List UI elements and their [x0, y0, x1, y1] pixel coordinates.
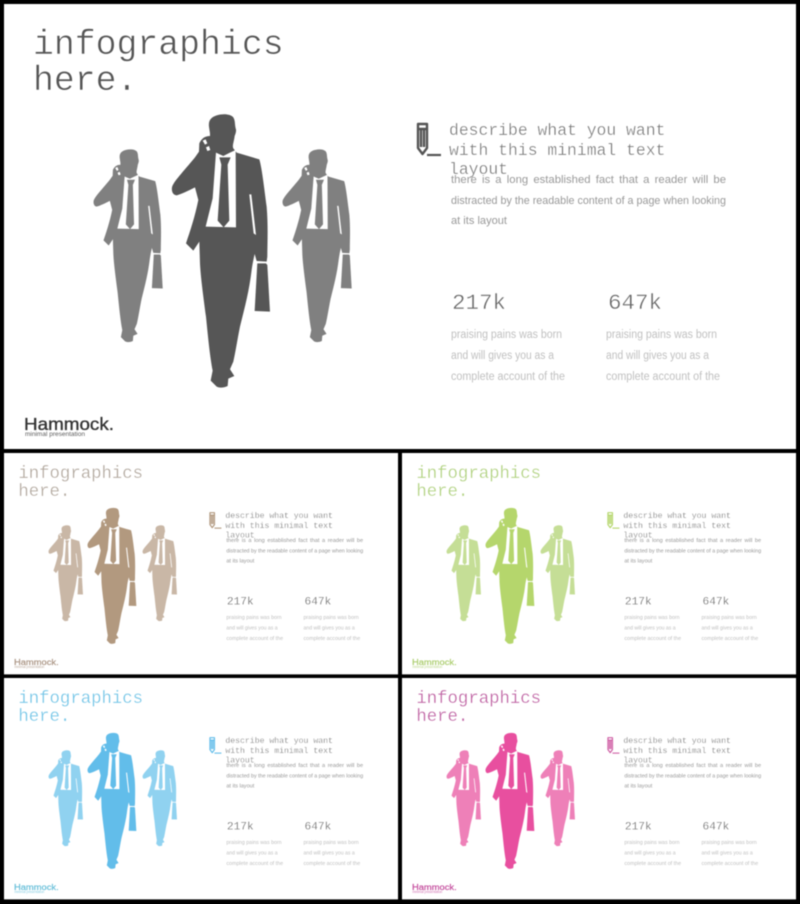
- title: infographics: [416, 690, 541, 709]
- stat caption left: and will gives you as a: [226, 626, 278, 632]
- title: infographics: [18, 465, 143, 484]
- stat caption left: praising pains was born: [624, 615, 680, 621]
- heading: layout: [225, 531, 255, 541]
- stat caption right: praising pains was born: [303, 840, 359, 846]
- logo: Hammock.: [412, 657, 457, 667]
- heading: describe what you want: [225, 511, 333, 521]
- body text: at its layout: [226, 783, 255, 789]
- stat caption right: complete account of the: [303, 861, 360, 867]
- heading: with this minimal text: [225, 746, 333, 756]
- body text: there is a long established fact that a reader will be: [226, 763, 363, 769]
- stat caption left: praising pains was born: [451, 329, 562, 341]
- stat caption right: complete account of the: [606, 371, 720, 383]
- logo: Hammock.: [14, 882, 59, 892]
- body text: at its layout: [451, 215, 507, 227]
- figures: three businessmen: [447, 733, 575, 869]
- stat caption left: complete account of the: [226, 861, 283, 867]
- stat caption left: and will gives you as a: [226, 851, 278, 857]
- icon: pencil: [608, 738, 619, 753]
- heading: describe what you want: [449, 121, 665, 140]
- body text: at its layout: [624, 558, 653, 564]
- title: here.: [18, 483, 70, 502]
- stat caption left: and will gives you as a: [451, 350, 555, 362]
- stat caption left: complete account of the: [451, 371, 565, 383]
- icon: pencil: [608, 513, 619, 528]
- heading: describe what you want: [623, 511, 731, 521]
- icon: pencil: [418, 124, 441, 155]
- stat: 647k: 647k: [304, 822, 332, 834]
- body text: there is a long established fact that a reader will be: [226, 538, 363, 544]
- panel: main grey slide: [4, 4, 796, 449]
- panel: green slide: [402, 453, 796, 674]
- title: infographics: [33, 26, 284, 65]
- stat caption left: praising pains was born: [226, 840, 282, 846]
- stat: 217k: 217k: [452, 290, 506, 316]
- figures: three businessmen: [94, 114, 352, 388]
- heading: with this minimal text: [449, 141, 665, 160]
- figures: three businessmen: [49, 508, 177, 644]
- stat: 647k: 647k: [304, 597, 332, 609]
- stat caption left: complete account of the: [226, 636, 283, 642]
- figures: three businessmen: [447, 508, 575, 644]
- body text: distracted by the readable content of a page when looking: [624, 549, 761, 555]
- stat caption left: praising pains was born: [624, 840, 680, 846]
- heading: with this minimal text: [623, 746, 731, 756]
- stat caption right: praising pains was born: [303, 615, 359, 621]
- panel: brown slide: [4, 453, 398, 674]
- panel: blue slide: [4, 678, 398, 899]
- title: here.: [33, 62, 137, 101]
- stat caption right: complete account of the: [701, 861, 758, 867]
- icon: pencil: [210, 513, 221, 528]
- stat caption left: complete account of the: [624, 861, 681, 867]
- stat: 217k: 217k: [625, 822, 652, 834]
- stat caption left: and will gives you as a: [624, 851, 676, 857]
- icon: pencil: [210, 738, 221, 753]
- stat caption right: complete account of the: [701, 636, 758, 642]
- body text: at its layout: [624, 783, 653, 789]
- body text: at its layout: [226, 558, 255, 564]
- stat caption right: complete account of the: [303, 636, 360, 642]
- body text: distracted by the readable content of a page when looking: [624, 774, 761, 780]
- logo: minimal presentation: [412, 665, 443, 669]
- heading: with this minimal text: [225, 521, 333, 531]
- logo: minimal presentation: [412, 890, 443, 894]
- stat: 217k: 217k: [625, 597, 652, 609]
- stat: 647k: 647k: [702, 822, 730, 834]
- body text: there is a long established fact that a reader will be: [624, 538, 761, 544]
- stat caption right: and will gives you as a: [303, 626, 355, 632]
- heading: describe what you want: [225, 736, 333, 746]
- stat caption right: and will gives you as a: [701, 626, 753, 632]
- body text: distracted by the readable content of a page when looking: [226, 549, 363, 555]
- stat: 217k: 217k: [227, 597, 254, 609]
- logo: minimal presentation: [14, 665, 45, 669]
- stat caption right: praising pains was born: [701, 840, 757, 846]
- logo: Hammock.: [14, 657, 59, 667]
- logo: Hammock.: [412, 882, 457, 892]
- title: infographics: [18, 690, 143, 709]
- panel: pink slide: [402, 678, 796, 899]
- stat caption right: and will gives you as a: [606, 350, 710, 362]
- stat: 647k: 647k: [702, 597, 730, 609]
- heading: layout: [623, 531, 653, 541]
- logo: minimal presentation: [14, 890, 45, 894]
- stat caption right: and will gives you as a: [303, 851, 355, 857]
- stat caption right: praising pains was born: [606, 329, 717, 341]
- stat caption left: praising pains was born: [226, 615, 282, 621]
- stat caption left: complete account of the: [624, 636, 681, 642]
- title: here.: [18, 708, 70, 727]
- heading: layout: [449, 160, 508, 179]
- heading: layout: [623, 756, 653, 766]
- title: here.: [416, 708, 468, 727]
- figures: three businessmen: [49, 733, 177, 869]
- body text: there is a long established fact that a reader will be: [624, 763, 761, 769]
- heading: with this minimal text: [623, 521, 731, 531]
- stat: 217k: 217k: [227, 822, 254, 834]
- heading: layout: [225, 756, 255, 766]
- heading: describe what you want: [623, 736, 731, 746]
- body text: distracted by the readable content of a page when looking: [451, 195, 726, 207]
- body text: distracted by the readable content of a page when looking: [226, 774, 363, 780]
- logo: minimal presentation: [25, 431, 85, 438]
- stat: 647k: 647k: [608, 290, 662, 316]
- stat caption left: and will gives you as a: [624, 626, 676, 632]
- stat caption right: and will gives you as a: [701, 851, 753, 857]
- stat caption right: praising pains was born: [701, 615, 757, 621]
- logo: Hammock.: [24, 414, 114, 434]
- title: infographics: [416, 465, 541, 484]
- title: here.: [416, 483, 468, 502]
- body text: there is a long established fact that a reader will be: [451, 174, 726, 186]
